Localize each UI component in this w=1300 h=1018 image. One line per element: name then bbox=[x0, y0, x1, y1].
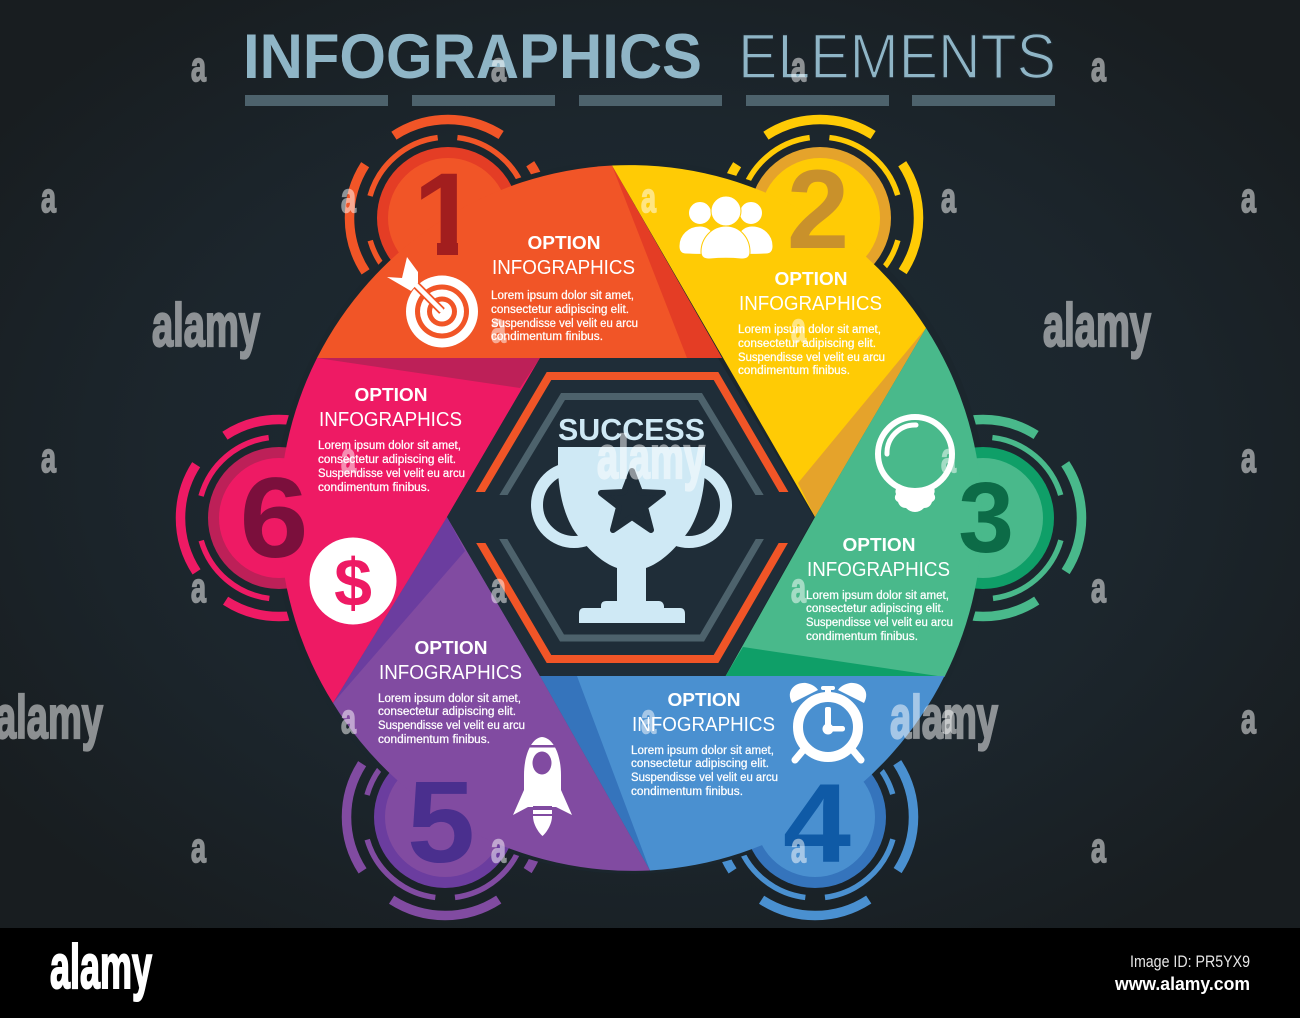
watermark large marks: alamy bbox=[597, 424, 705, 491]
text block 6: INFOGRAPHICS bbox=[319, 409, 462, 431]
watermark large marks: alamy bbox=[152, 292, 260, 359]
watermark small marks: a bbox=[941, 434, 956, 481]
watermark small marks: a bbox=[191, 43, 206, 90]
watermark small marks: a bbox=[641, 695, 656, 742]
footer logo: alamy bbox=[50, 933, 152, 1002]
icon: dollar coin bbox=[310, 538, 396, 624]
watermark small marks: a bbox=[1091, 824, 1106, 871]
text block 1: OPTION bbox=[528, 233, 600, 253]
text block 2: Suspendisse vel velit eu arcu bbox=[738, 352, 885, 364]
trophy icon bbox=[537, 412, 726, 623]
watermark small marks: a bbox=[1241, 174, 1256, 221]
text block 3: INFOGRAPHICS bbox=[807, 559, 950, 581]
watermark small marks bbox=[41, 43, 1256, 871]
title: INFOGRAPHICS bbox=[243, 22, 702, 92]
icon: light bulb bbox=[878, 417, 952, 512]
watermark small marks: a bbox=[941, 174, 956, 221]
watermark small marks: a bbox=[341, 174, 356, 221]
watermark small marks: a bbox=[791, 304, 806, 351]
icon: dollar coin: $ bbox=[334, 545, 372, 621]
text block 6: Suspendisse vel velit eu arcu bbox=[318, 468, 465, 480]
text block 4: Lorem ipsum dolor sit amet, bbox=[631, 745, 774, 757]
text block 2 bbox=[738, 269, 885, 377]
icon: target and dart bbox=[387, 257, 478, 348]
watermark small marks: a bbox=[41, 434, 56, 481]
watermark small marks: a bbox=[191, 564, 206, 611]
text block 6: condimentum finibus. bbox=[318, 482, 430, 494]
text block 1 bbox=[491, 233, 638, 343]
numeral 4: 4 bbox=[783, 761, 851, 886]
text block 5: Suspendisse vel velit eu arcu bbox=[378, 720, 525, 732]
text block 3: Suspendisse vel velit eu arcu bbox=[806, 617, 953, 629]
watermark small marks: a bbox=[491, 43, 506, 90]
text block 5: condimentum finibus. bbox=[378, 734, 490, 746]
text block 4: Suspendisse vel velit eu arcu bbox=[631, 772, 778, 784]
watermark small marks: a bbox=[1091, 43, 1106, 90]
segment 6 pink bbox=[279, 358, 540, 703]
text block 1: Suspendisse vel velit eu arcu bbox=[491, 318, 638, 330]
watermark small marks: a bbox=[1241, 434, 1256, 481]
watermark small marks: a bbox=[641, 174, 656, 221]
number badge discs bbox=[208, 147, 1054, 888]
watermark small marks: a bbox=[1091, 564, 1106, 611]
watermark small marks: a bbox=[341, 434, 356, 481]
text block 4: consectetur adipiscing elit. bbox=[631, 758, 769, 770]
text block 2: INFOGRAPHICS bbox=[739, 293, 882, 315]
text block 4: condimentum finibus. bbox=[631, 786, 743, 798]
title: ELEMENTS bbox=[738, 22, 1056, 92]
text block 2: consectetur adipiscing elit. bbox=[738, 338, 876, 350]
segment 3 green bbox=[725, 328, 982, 677]
icon: alarm clock bbox=[790, 683, 866, 760]
text block 5 bbox=[378, 638, 525, 746]
watermark small marks: a bbox=[191, 824, 206, 871]
watermark small marks: a bbox=[791, 43, 806, 90]
text block 1: INFOGRAPHICS bbox=[492, 257, 635, 279]
numeral 3: 3 bbox=[958, 462, 1014, 574]
numeral 5: 5 bbox=[407, 757, 475, 887]
icon: rocket bbox=[513, 737, 572, 836]
trophy icon: SUCCESS bbox=[558, 412, 705, 447]
watermark small marks: a bbox=[341, 695, 356, 742]
segment 5 purple bbox=[333, 517, 650, 871]
footer image id: Image ID: PR5YX9 bbox=[1130, 952, 1250, 971]
text block 5: Lorem ipsum dolor sit amet, bbox=[378, 693, 521, 705]
watermark large marks: alamy bbox=[0, 684, 103, 751]
text block 6 bbox=[318, 385, 465, 494]
watermark small marks: a bbox=[941, 695, 956, 742]
number badge arcs bbox=[180, 120, 1082, 916]
footer bar bbox=[0, 928, 1300, 1018]
text block 5: consectetur adipiscing elit. bbox=[378, 706, 516, 718]
text block 1: condimentum finibus. bbox=[491, 331, 603, 343]
text block 2: Lorem ipsum dolor sit amet, bbox=[738, 324, 881, 336]
text block 4: INFOGRAPHICS bbox=[632, 714, 775, 736]
title underline bars bbox=[245, 95, 1055, 106]
watermark large marks: alamy bbox=[1043, 292, 1151, 359]
segment 4 blue bbox=[540, 676, 944, 870]
text block 5: INFOGRAPHICS bbox=[379, 662, 522, 684]
text block 1: Lorem ipsum dolor sit amet, bbox=[491, 290, 634, 302]
segment 1 orange bbox=[317, 166, 722, 358]
numeral 1: 1 bbox=[413, 149, 479, 281]
text block 6: Lorem ipsum dolor sit amet, bbox=[318, 440, 461, 452]
central hexagon bbox=[447, 358, 814, 676]
text block 4 bbox=[631, 690, 778, 798]
watermark small marks: a bbox=[491, 564, 506, 611]
text block 2: condimentum finibus. bbox=[738, 365, 850, 377]
numeral 2: 2 bbox=[787, 147, 849, 272]
numeral 6: 6 bbox=[240, 455, 308, 582]
text block 3 bbox=[806, 535, 953, 643]
text block 3: consectetur adipiscing elit. bbox=[806, 603, 944, 615]
text block 6: consectetur adipiscing elit. bbox=[318, 454, 456, 466]
title bbox=[243, 22, 1056, 92]
watermark small marks: a bbox=[791, 564, 806, 611]
dark halo around wheel bbox=[274, 160, 988, 874]
watermark large marks bbox=[0, 292, 1151, 751]
watermark small marks: a bbox=[791, 824, 806, 871]
text block 3: condimentum finibus. bbox=[806, 631, 918, 643]
watermark small marks: a bbox=[1241, 695, 1256, 742]
text block 2: OPTION bbox=[774, 269, 848, 289]
watermark small marks: a bbox=[491, 824, 506, 871]
text block 6: OPTION bbox=[354, 385, 428, 405]
footer url: www.alamy.com bbox=[1114, 974, 1250, 994]
text block 5: OPTION bbox=[414, 638, 488, 658]
text block 1: consectetur adipiscing elit. bbox=[491, 304, 629, 316]
icon: team bbox=[679, 196, 773, 259]
watermark large marks: alamy bbox=[890, 684, 998, 751]
watermark small marks: a bbox=[41, 174, 56, 221]
text block 3: OPTION bbox=[842, 535, 916, 555]
text block 3: Lorem ipsum dolor sit amet, bbox=[806, 590, 949, 602]
text block 4: OPTION bbox=[668, 690, 740, 710]
segment 2 yellow bbox=[612, 165, 926, 517]
watermark small marks: a bbox=[491, 304, 506, 351]
